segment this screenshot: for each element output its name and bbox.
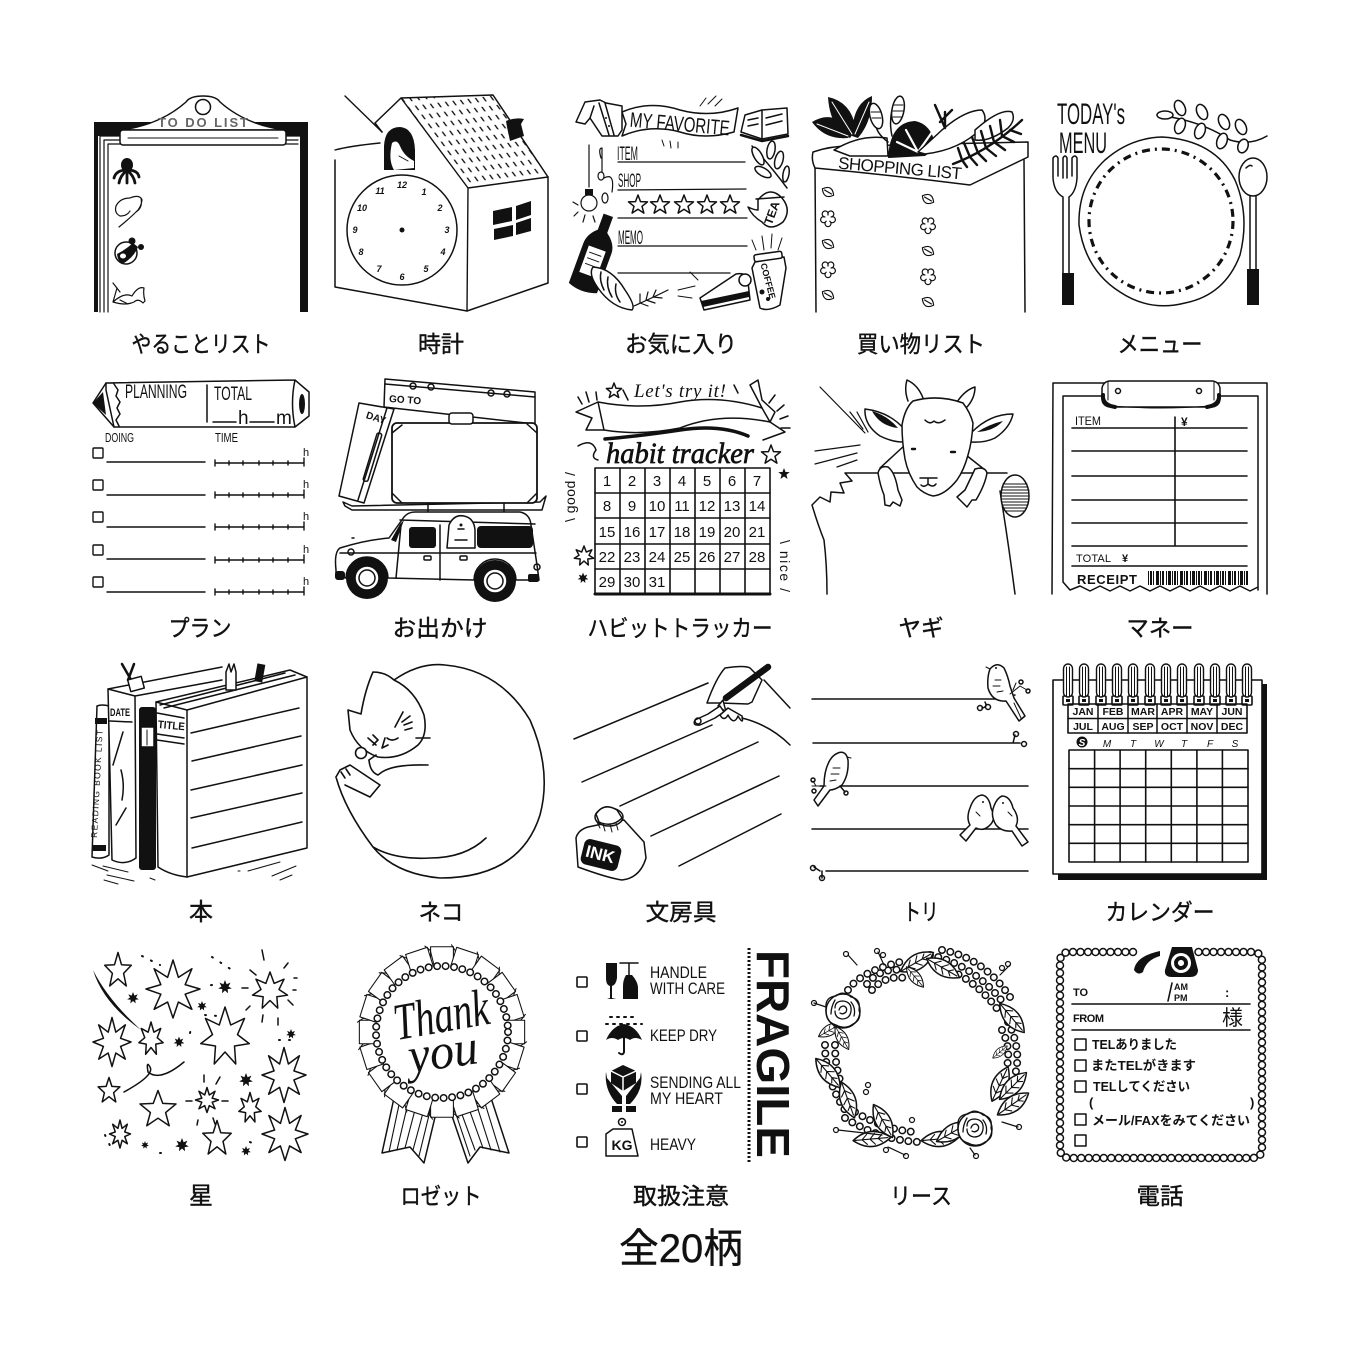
form lines and labels: SHOP [618,171,641,192]
month selector: AUG [1101,721,1125,733]
pencil header: PLANNING [125,382,187,403]
task rows: h [303,479,309,491]
bookmarks [122,663,265,692]
icon: cake slice [678,272,751,310]
house body and roof [335,95,548,311]
panel: today's menu [1053,98,1267,306]
calendar numbers: 1 [603,473,611,490]
clock face: 2 [436,203,443,213]
label: birds: トリ [904,899,938,925]
care text: HANDLE [650,963,707,982]
receipt labels: ¥ [1181,415,1188,429]
label: plan: プラン [168,615,232,641]
cat paws and legs [336,738,430,797]
form fields: PM [1174,993,1188,1003]
goat legs [878,445,987,507]
clock face [347,175,457,285]
calendar numbers: 2 [628,473,636,490]
label: shopping list: 買い物リスト [857,331,985,357]
calendar numbers: 6 [728,473,736,490]
icon: shirt [576,100,622,136]
label: habit tracker: ハビットトラッカー [588,615,772,641]
calendar numbers: 14 [749,498,765,515]
back suitcase [384,379,535,424]
table lines [1072,417,1247,566]
month selector: JUL [1073,721,1094,733]
task rows [93,447,309,595]
calendar numbers: 9 [628,498,636,515]
clock face: 4 [439,247,446,257]
weekday row: W [1154,739,1165,750]
thank you script: Thank [389,979,494,1052]
house window [493,201,531,240]
habit tracker script title: habit tracker [606,437,754,470]
icon: teapot: TEA [761,199,783,227]
calendar numbers: 10 [649,498,665,515]
thank you script [389,979,494,1084]
icon: open book [741,108,788,141]
month selector [1068,704,1247,733]
care text: HEAVY [650,1135,696,1154]
calendar numbers: 17 [649,524,665,541]
receipt labels: TOTAL [1076,553,1112,565]
thank you script: you [399,1018,481,1084]
form fields: TO [1073,987,1089,999]
panel: stars [93,950,308,1160]
heading let's try it [578,381,790,428]
weekday row: F [1207,739,1214,750]
calendar numbers: 29 [599,574,615,591]
calendar numbers: 15 [599,524,615,541]
label: outing: お出かけ [392,615,488,641]
thin reading list book [89,705,109,858]
panel: cuckoo clock house [335,95,548,311]
calendar sheet with shadow [1053,680,1267,880]
calendar numbers [599,473,765,591]
roses [826,993,992,1146]
panel: birds on lines [810,665,1030,880]
panel: fragile [577,948,799,1163]
form lines and labels: MEMO [618,228,643,249]
panel: rosette [357,945,527,1163]
month selector: DEC [1221,721,1244,733]
task rows: h [303,511,309,523]
icon: baguette [591,267,633,310]
column headings: TIME [215,430,238,445]
goat ears [865,409,1013,442]
pair of birds [960,795,1028,846]
panel: telephone memo [1060,947,1262,1158]
ruled lines with twigs [810,695,1028,880]
calendar numbers: 16 [624,524,640,541]
bird 2 [811,752,851,806]
label: favorite: お気に入り [625,331,737,357]
side words and stars [562,468,793,592]
icon: panda [115,238,144,264]
bag folded top with title: SHOPPING LIST [837,154,963,183]
calendar numbers: 7 [753,473,761,490]
black book [139,707,156,870]
calendar numbers: 4 [678,473,686,490]
date book [108,667,222,863]
weekday row [1076,736,1239,750]
label: to do list: やることリスト [132,331,270,357]
form fields: AM [1174,982,1188,992]
banner with title: MY FAVORITE [629,109,731,140]
side words and stars: \ nice / [777,540,793,592]
month selector: FEB [1102,706,1124,718]
car body [336,503,540,580]
cuckoo door and bird [384,127,415,170]
form lines and labels [617,144,747,273]
ink bottle [576,807,646,880]
checklist: ) [1250,1095,1254,1110]
icon: teapot [748,192,787,227]
thin reading list book: READING BOOK LIST [89,730,105,838]
clock face: 8 [358,247,364,257]
panel: goat [812,380,1029,594]
calendar numbers: 23 [624,549,640,566]
small black stars and sparkles [105,950,297,1156]
label: clock: 時計 [418,331,464,357]
twigs with berries [812,948,1022,1158]
label: cat: ネコ [418,899,464,925]
bag folded top with title [812,142,1028,185]
task rows: h [303,576,309,588]
calendar numbers: 31 [649,574,665,591]
barcode [1148,571,1248,585]
weekday row: M [1103,739,1112,750]
footer: total of 20 designs: 全20柄 [619,1227,743,1271]
cat head [348,672,425,758]
mimosa bead clusters [825,950,1017,1142]
care text [650,963,741,1154]
clock face: 9 [352,225,358,235]
label: wreath: リース [890,1183,952,1209]
panel: my favorite [568,96,790,310]
panel: to do list clipboard [94,96,308,312]
shopping bag [815,160,1025,312]
rope divider [748,948,750,1163]
checklist: ( [1089,1095,1094,1110]
calendar numbers: 8 [603,498,611,515]
menu title [1057,98,1125,160]
big title book [156,670,307,877]
pencil header: TOTAL [214,384,252,405]
leaf branch [1157,99,1267,154]
clipboard board [94,122,308,312]
checkboxes [577,977,587,1147]
form fields: FROM [1073,1013,1104,1025]
calendar numbers: 5 [703,473,711,490]
icon: hands and box [606,1065,642,1112]
panel: habit tracker [562,380,793,594]
torn paper [812,473,1015,594]
label: menu: メニュー [1118,331,1202,357]
leaves [810,946,1033,1148]
receipt labels [1075,414,1188,587]
menu title: MENU [1059,127,1107,160]
panel: calendar [1053,664,1267,880]
chimney [506,118,524,141]
month selector: NOV [1191,721,1213,733]
left suitcase [339,403,394,503]
groceries [812,95,1022,167]
icon: umbrella [606,1017,642,1054]
label: stationery: 文房具 [646,899,716,925]
panel: shopping list [812,95,1028,312]
ribbon banner [576,380,785,440]
task rows: h [303,447,309,459]
icon: glasses [606,963,638,999]
date book: DATE [110,707,130,719]
form lines and labels: ITEM [617,144,638,165]
month selector: SEP [1132,721,1154,733]
weekday row: S [1079,738,1086,749]
icon: leaf branch [750,140,790,188]
weekday row: T [1181,739,1188,750]
icon: coffee cup [752,234,786,309]
heading let's try it: Let's try it! [633,381,726,402]
calendar numbers: 24 [649,549,665,566]
icon: bottle [568,211,623,296]
ribbon tails [382,1098,509,1163]
label: book: 本 [189,899,213,926]
icon: telephone [1134,947,1198,977]
icon: sprig [634,290,668,306]
calendar grid [595,468,770,594]
menu title: TODAY's [1057,98,1125,131]
calendar numbers: 28 [749,549,765,566]
clock face: 1 [421,187,427,197]
icon: hanging bulb and hooks [573,145,613,222]
panel: plan [93,380,309,595]
checklist: TELありました [1092,1037,1177,1052]
fork [1053,156,1077,305]
plate with patterned rim [1079,137,1244,306]
calendar numbers: 21 [749,524,765,541]
receipt labels: ¥ [1122,553,1129,565]
calendar numbers: 25 [674,549,690,566]
label: handling: 取扱注意 [633,1183,729,1209]
bird 1 [986,665,1030,721]
curl trail [124,1062,184,1092]
panel: sleeping cat [336,665,544,878]
clock face: 11 [375,186,385,196]
panel: money receipt [1052,381,1267,594]
outlined stars [93,952,308,1160]
pencil header: m [276,408,292,429]
icon: rabbit [113,283,145,304]
left suitcase: DAY [364,410,387,427]
checklist: TELしてください [1093,1079,1190,1094]
shooting star [93,970,141,1030]
goat horns [906,380,975,407]
pleated rosette ring [357,945,527,1119]
calendar numbers: 11 [674,498,690,515]
banner with title [622,96,738,148]
label: goat: ヤギ [898,615,944,641]
board clip [1102,381,1220,408]
calendar numbers: 30 [624,574,640,591]
form fields [1072,982,1250,1030]
month selector: OCT [1161,721,1184,733]
pencil header [93,380,309,429]
panel: wreath [810,946,1033,1158]
label: money: マネー [1126,615,1194,641]
month selector: APR [1161,706,1184,718]
calendar numbers: 18 [674,524,690,541]
month selector: JUN [1221,706,1243,718]
cat body outline [336,665,544,878]
care text: KEEP DRY [650,1026,717,1045]
clock face: 10 [357,203,367,213]
icon: weight: KG [612,1137,633,1153]
calendar numbers: 13 [724,498,740,515]
five star rating [628,195,740,213]
spoon [1239,158,1267,305]
clipboard and receipt outline [1052,383,1267,594]
side words and stars: \ good / [562,472,578,522]
panel: outing car with suitcases [335,379,546,602]
speed lines [815,387,868,467]
column headings: DOING [105,430,134,445]
month selector: JAN [1072,706,1094,718]
icon: octopus [114,158,139,183]
clock face: 7 [376,264,382,274]
icon: weight [606,1118,638,1156]
icon: coffee cup: COFFEE [758,262,778,300]
label: rosette: ロゼット [400,1183,482,1209]
paper roll [1001,475,1029,517]
weekday row: T [1130,739,1137,750]
clock face: 3 [444,225,450,235]
calendar numbers: 20 [724,524,740,541]
clock face: 12 [397,180,407,190]
bead ring [376,966,508,1098]
care text: MY HEART [650,1089,723,1108]
car wheels [335,557,539,602]
big title book: TITLE [157,719,185,733]
calendar numbers: 19 [699,524,715,541]
hand holding pen [694,666,790,745]
clipboard clip with title [120,96,286,145]
calendar numbers: 26 [699,549,715,566]
calendar numbers: 12 [699,498,715,515]
form fields: 様 [1222,1007,1243,1030]
panel: stationery [574,666,790,880]
calendar numbers: 27 [724,549,740,566]
receipt labels: ITEM [1075,414,1101,428]
goat head [902,398,973,496]
ink bottle: INK [584,842,617,867]
label: telephone: 電話 [1136,1183,1184,1209]
rack [343,496,546,510]
clipboard clip with title: TO DO LIST [158,115,248,130]
column headings [105,430,238,445]
checklist: またTELがきます [1091,1058,1196,1073]
icon: elephant [116,196,142,227]
receipt labels: RECEIPT [1077,572,1137,587]
label: stars: 星 [189,1183,213,1210]
clock face: 6 [399,272,405,282]
clock face: 5 [423,264,429,274]
fragile vertical text: FRAGILE [747,950,799,1158]
task rows: h [303,544,309,556]
pencil header: h [238,408,249,429]
loop border [1060,952,1262,1158]
calendar numbers: 22 [599,549,615,566]
care text: SENDING ALL [650,1073,741,1092]
month selector: MAR [1131,706,1155,718]
checklist: メール/FAXをみてください [1092,1113,1250,1128]
month selector: MAY [1191,706,1213,718]
panel: books [89,663,307,884]
bullet icons [820,185,936,309]
label: calendar: カレンダー [1106,899,1214,925]
form fields: : [1225,985,1229,1000]
checklist [1075,1037,1254,1146]
front suitcase [392,413,537,503]
back suitcase: GO TO [389,394,422,407]
date grid [1069,750,1248,862]
weekday row: S [1232,739,1239,750]
writing lines [574,683,781,866]
ground hatching [92,862,296,884]
calendar numbers: 3 [653,473,661,490]
spiral rings [1063,664,1252,705]
care text: WITH CARE [650,979,725,998]
